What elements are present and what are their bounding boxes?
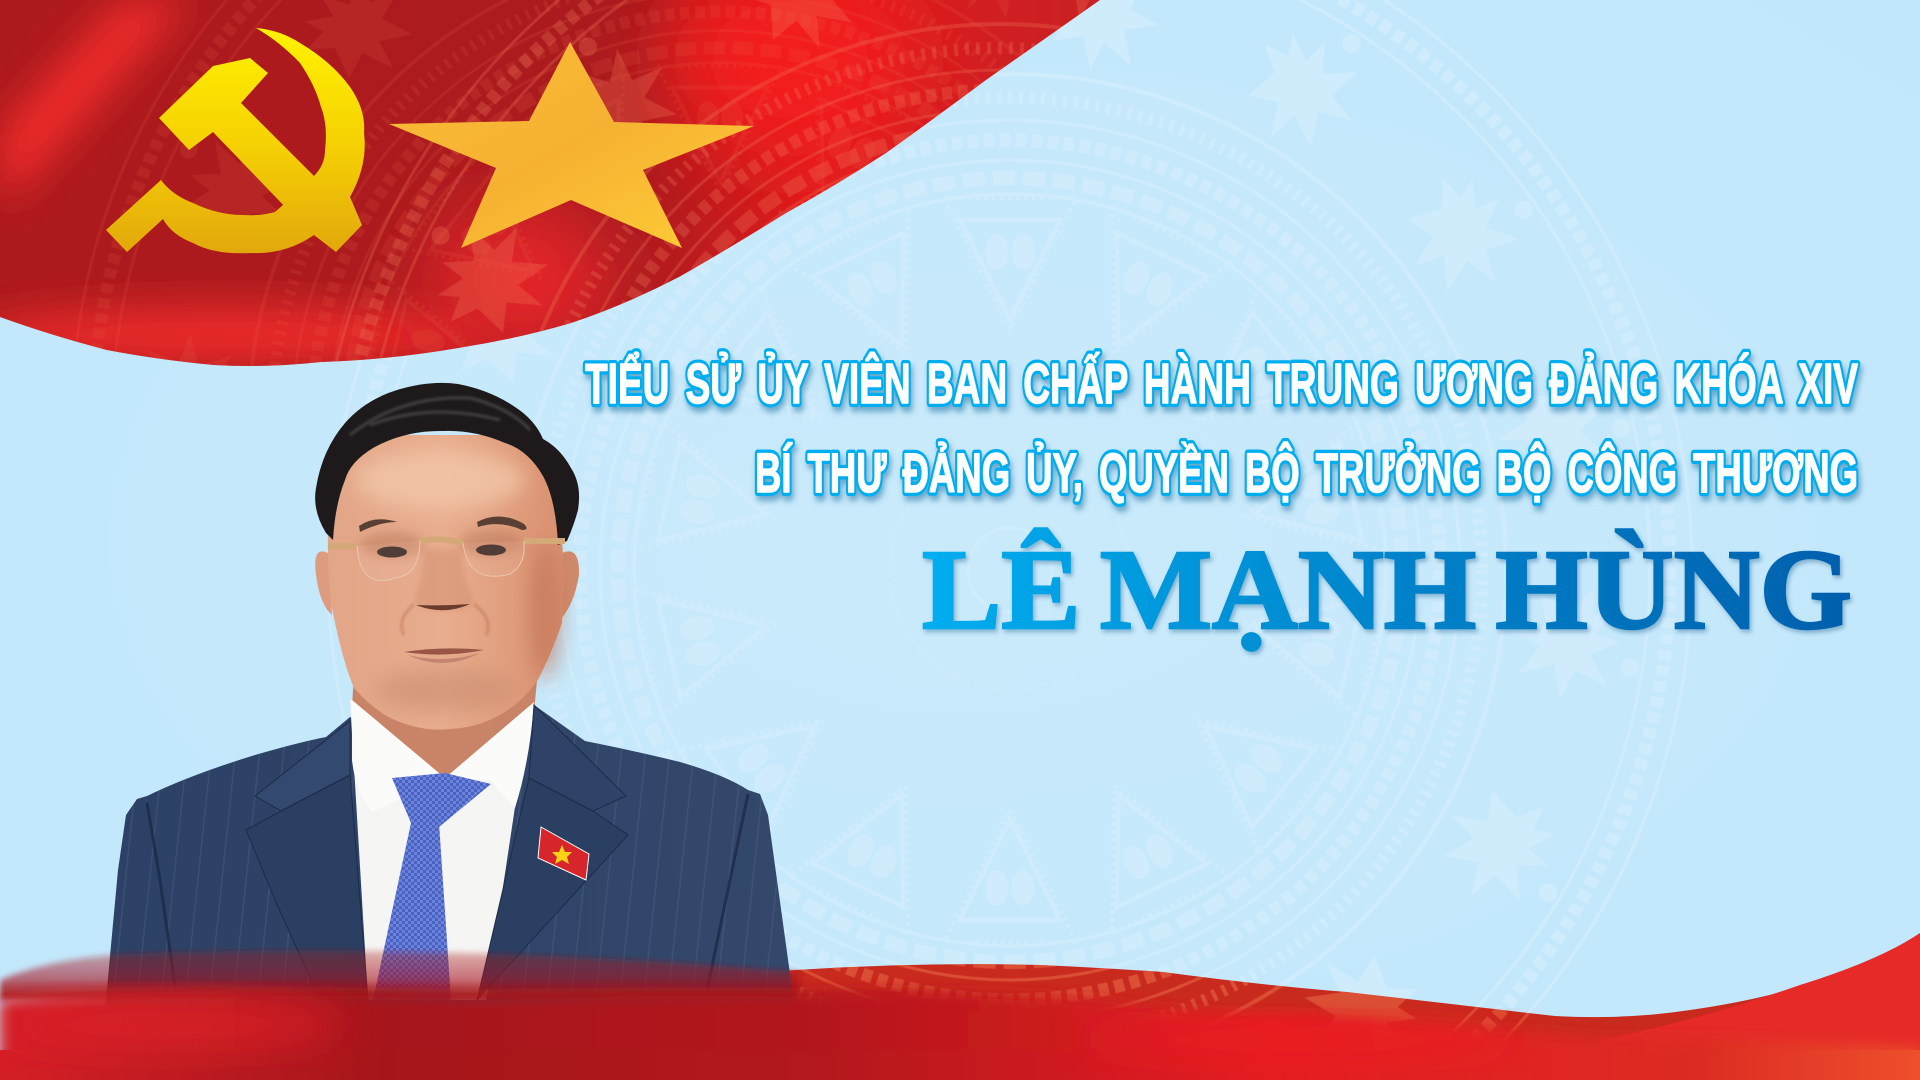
eyes xyxy=(377,546,407,558)
panel: bottom red ribbon front xyxy=(0,950,1920,1080)
hair xyxy=(315,383,579,545)
eyebrows xyxy=(359,516,527,532)
lapel pin flag xyxy=(538,827,589,880)
portrait: man in suit xyxy=(105,383,795,1010)
nose xyxy=(414,550,474,610)
lapels xyxy=(246,705,628,1000)
title: name: LÊ MẠNH HÙNG xyxy=(922,526,1852,653)
mouth xyxy=(404,648,484,655)
head xyxy=(315,383,579,730)
panel: bottom red ribbon back xyxy=(700,933,1920,1080)
panel: red flag banner xyxy=(0,0,1100,366)
icon: gold star xyxy=(389,42,754,248)
hammer xyxy=(159,58,314,212)
collar xyxy=(352,700,534,812)
icon: hammer and sickle xyxy=(106,28,365,253)
icon: pin star xyxy=(552,845,572,864)
glasses xyxy=(328,539,565,546)
sickle xyxy=(106,28,365,253)
tie xyxy=(373,773,491,1000)
neck xyxy=(352,670,538,778)
suit jacket xyxy=(105,705,795,1010)
shirt xyxy=(350,700,534,1000)
